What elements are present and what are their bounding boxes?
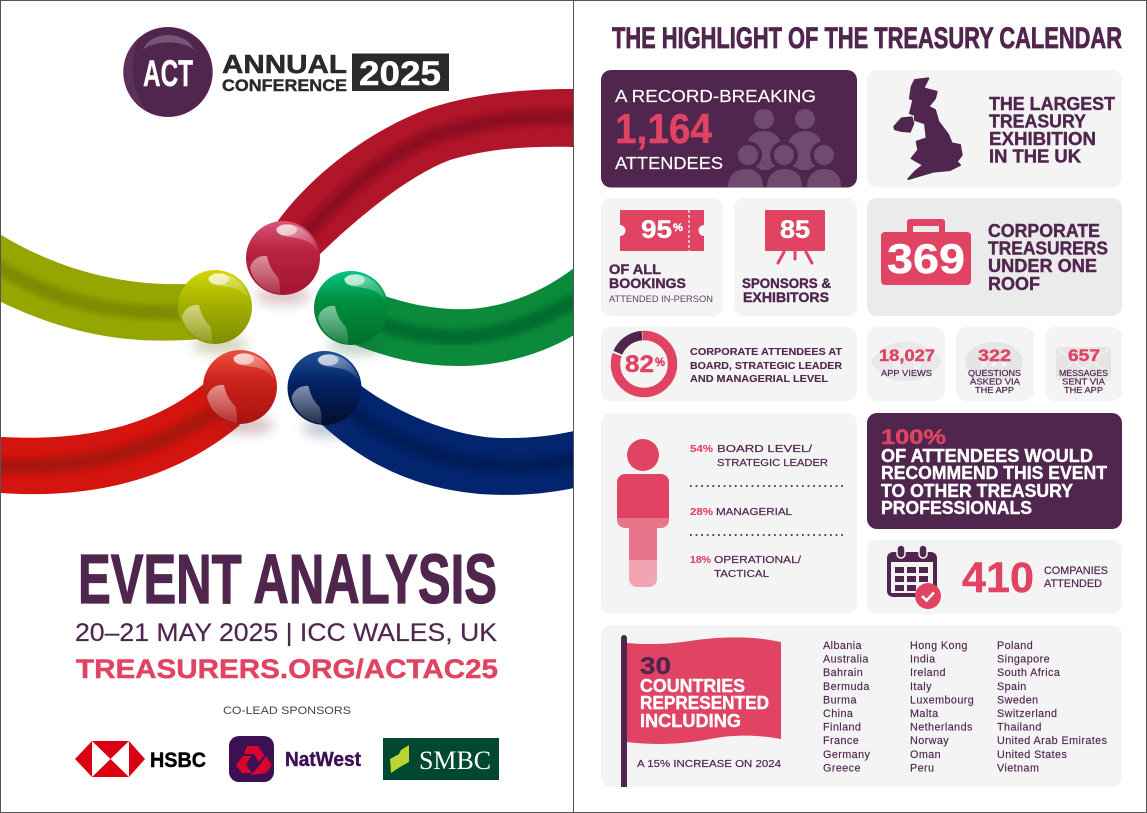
icon: ticket: 95	[641, 216, 672, 244]
logo: ACT Annual Conference 2025: 2025	[359, 55, 441, 93]
sphere shadows	[192, 287, 384, 437]
country list: column 3: Sweden	[997, 694, 1039, 706]
level: operational: OPERATIONAL/	[714, 554, 801, 566]
country list: column 2: Luxembourg	[910, 694, 974, 706]
icon: ticket	[620, 210, 704, 251]
card: seniority breakdown	[601, 413, 857, 614]
country list: column 1: France	[823, 735, 859, 747]
country list: column 3: Switzerland	[997, 708, 1057, 720]
card: 657 messages: 657	[1068, 346, 1100, 365]
icon: ticket: %	[673, 222, 683, 234]
donut chart: %	[655, 355, 665, 369]
country list: column 1: Finland	[823, 722, 861, 734]
card: largest exhibition	[867, 70, 1122, 188]
card: 95 percent bookings: ATTENDED IN-PERSON	[609, 294, 713, 304]
icon: speech bubble	[965, 342, 1023, 385]
card: countries represented	[601, 625, 1122, 787]
country list: column 3: Poland	[997, 640, 1033, 652]
ribbon: crimson	[275, 89, 580, 256]
icon: briefcase	[881, 219, 971, 285]
icon: flag: INCLUDING	[640, 711, 741, 731]
text	[690, 346, 843, 385]
icon: flag	[621, 635, 781, 787]
text: BOARD, STRATEGIC LEADER	[690, 360, 842, 372]
panel: treasury highlights	[601, 22, 1122, 787]
text: TREASURERS	[988, 238, 1108, 258]
card: 95 percent bookings: OF ALL	[609, 261, 661, 277]
country list: column 1	[823, 640, 871, 774]
country list: column 1: Albania	[823, 640, 862, 652]
text: UNDER ONE	[988, 256, 1097, 276]
card: 100 percent recommend: PROFESSIONALS	[881, 498, 1032, 518]
country list: column 1: Greece	[823, 762, 861, 774]
country list: column 2: Italy	[910, 681, 932, 693]
level: board: 54%	[690, 444, 713, 455]
text: EXHIBITION	[989, 129, 1096, 149]
level: managerial	[690, 506, 792, 518]
logo: ACT Annual Conference 2025: ANNUAL	[222, 49, 347, 79]
card: 82 percent corporate attendees	[601, 327, 857, 401]
icon: flag: 30	[640, 653, 671, 680]
card: 100 percent recommend: RECOMMEND THIS EVENT	[881, 463, 1107, 483]
text: CORPORATE	[988, 221, 1100, 241]
logo: SMBC: SMBC	[419, 746, 491, 775]
card: 322 questions	[956, 327, 1034, 401]
text: AND MANAGERIAL LEVEL	[690, 373, 829, 385]
donut chart: 82	[625, 351, 654, 378]
icon: UK map	[894, 78, 962, 179]
ribbon: green	[355, 268, 580, 366]
country list: column 3: South Africa	[997, 667, 1060, 679]
card: 100 percent recommend	[867, 413, 1122, 529]
card: sponsors and exhibitors: EXHIBITORS	[743, 289, 829, 305]
country list: column 3: Vietnam	[997, 762, 1039, 774]
logo: ACT Annual Conference 2025	[123, 27, 449, 117]
icon: group of people	[724, 109, 845, 187]
sphere: red	[203, 350, 277, 424]
level: operational: TACTICAL	[714, 568, 769, 580]
country list: column 1: Australia	[823, 654, 869, 666]
level: board	[690, 443, 828, 469]
card: 657 messages: SENT VIA	[1062, 376, 1105, 386]
sphere: olive	[178, 270, 252, 344]
logo: NatWest: NatWest	[285, 748, 361, 771]
co-lead sponsors label: CO-LEAD SPONSORS	[223, 705, 351, 717]
card: 322 questions: ASKED VIA	[970, 376, 1020, 386]
text: CORPORATE ATTENDEES AT	[690, 346, 843, 358]
text	[988, 221, 1108, 294]
title: event analysis: EVENT ANALYSIS	[78, 540, 497, 618]
card: 322 questions: THE APP	[975, 385, 1014, 395]
card: 657 messages	[1045, 327, 1122, 401]
card: 410 companies: ATTENDED	[1044, 578, 1102, 590]
country list: column 3: Thailand	[997, 722, 1042, 734]
donut chart	[616, 336, 672, 392]
card: 657 messages: THE APP	[1064, 385, 1103, 395]
level: board: STRATEGIC LEADER	[717, 457, 828, 469]
country list: column 2: Ireland	[910, 667, 946, 679]
country list: column 2: Oman	[910, 749, 941, 761]
country list: column 1: Bahrain	[823, 667, 863, 679]
card: 657 messages: MESSAGES	[1059, 368, 1108, 378]
logo: HSBC	[75, 741, 206, 777]
card: 18,027 app views: APP VIEWS	[881, 368, 932, 378]
sphere: crimson	[246, 221, 320, 295]
card: 322 questions: 322	[978, 346, 1011, 365]
card: 18,027 app views: 18,027	[879, 346, 935, 365]
card: 410 companies	[867, 540, 1122, 614]
card: 100 percent recommend: 100%	[881, 426, 946, 449]
text: ROOF	[988, 274, 1040, 294]
country list: column 2: India	[910, 654, 936, 666]
date and venue: 20–21 MAY 2025 | ICC WALES, UK	[75, 619, 497, 647]
country list: column 2: Malta	[910, 708, 939, 720]
country list: column 3: United Arab Emirates	[997, 735, 1108, 747]
card: sponsors and exhibitors	[734, 198, 857, 316]
text: TREASURY	[989, 112, 1086, 132]
icon: briefcase: 369	[887, 235, 965, 282]
card: 95 percent bookings: BOOKINGS	[609, 275, 686, 291]
ribbons and spheres illustration	[0, 89, 580, 495]
card: 410 companies: 410	[962, 554, 1034, 602]
level: managerial: 28%	[690, 507, 713, 518]
card: 410 companies: COMPANIES	[1044, 565, 1108, 577]
country list: column 3: United States	[997, 749, 1067, 761]
logo: ACT Annual Conference 2025: CONFERENCE	[222, 77, 347, 95]
icon: flag: REPRESENTED	[640, 693, 769, 713]
logo: HSBC: HSBC	[150, 749, 206, 772]
country list: column 2: Hong Kong	[910, 640, 968, 652]
level: managerial: MANAGERIAL	[716, 506, 792, 518]
sphere: green	[314, 271, 388, 345]
icon: flag: COUNTRIES	[640, 676, 745, 696]
icon: eye	[871, 342, 942, 382]
website link: TREASURERS.ORG/ACTAC25	[76, 654, 498, 684]
card: 369 corporate treasurers	[867, 198, 1122, 316]
country list: column 1: Burma	[823, 694, 857, 706]
country list: column 2	[910, 640, 974, 774]
country list: column 3: Spain	[997, 681, 1027, 693]
ribbon: blue	[320, 385, 580, 495]
card: record-breaking attendees: ATTENDEES	[615, 153, 723, 173]
card: 18,027 app views	[867, 327, 945, 401]
text	[989, 94, 1115, 166]
card: sponsors and exhibitors: SPONSORS &	[742, 275, 831, 291]
panel: cover	[0, 27, 580, 782]
card: record-breaking attendees	[601, 70, 857, 188]
logo: NatWest	[229, 736, 361, 782]
chart: person split by level	[617, 439, 669, 587]
country list: column 3	[997, 640, 1108, 774]
country list: column 2: Netherlands	[910, 722, 973, 734]
logo: SMBC	[383, 738, 499, 780]
icon: presentation easel: 85	[780, 216, 810, 244]
card: 95 percent bookings	[601, 198, 723, 316]
ribbon: olive	[0, 235, 200, 341]
country list: column 1: China	[823, 708, 853, 720]
country list: column 3: Singapore	[997, 654, 1050, 666]
level: operational	[690, 554, 801, 580]
card: 100 percent recommend: TO OTHER TREASURY	[881, 481, 1073, 501]
country list: column 2: Norway	[910, 735, 949, 747]
country list: column 1: Bermuda	[823, 681, 870, 693]
country list: column 2: Peru	[910, 762, 934, 774]
card: 100 percent recommend: OF ATTENDEES WOULD	[881, 446, 1093, 466]
icon: calendar with check	[887, 545, 941, 609]
country list: column 1: Germany	[823, 749, 871, 761]
sphere: blue	[288, 351, 362, 425]
card: record-breaking attendees: 1,164	[615, 105, 713, 152]
card: 322 questions: QUESTIONS	[968, 368, 1021, 378]
text: IN THE UK	[989, 146, 1081, 166]
ribbon: red	[0, 383, 240, 494]
logo: ACT Annual Conference 2025: ACT	[143, 53, 193, 94]
card: record-breaking attendees: A RECORD-BREAKING	[615, 86, 816, 106]
level: operational: 18%	[690, 555, 711, 566]
icon: envelope	[1056, 347, 1111, 380]
text: THE LARGEST	[989, 94, 1115, 114]
level: board: BOARD LEVEL/	[717, 443, 812, 455]
increase note: A 15% INCREASE ON 2024	[637, 758, 781, 770]
